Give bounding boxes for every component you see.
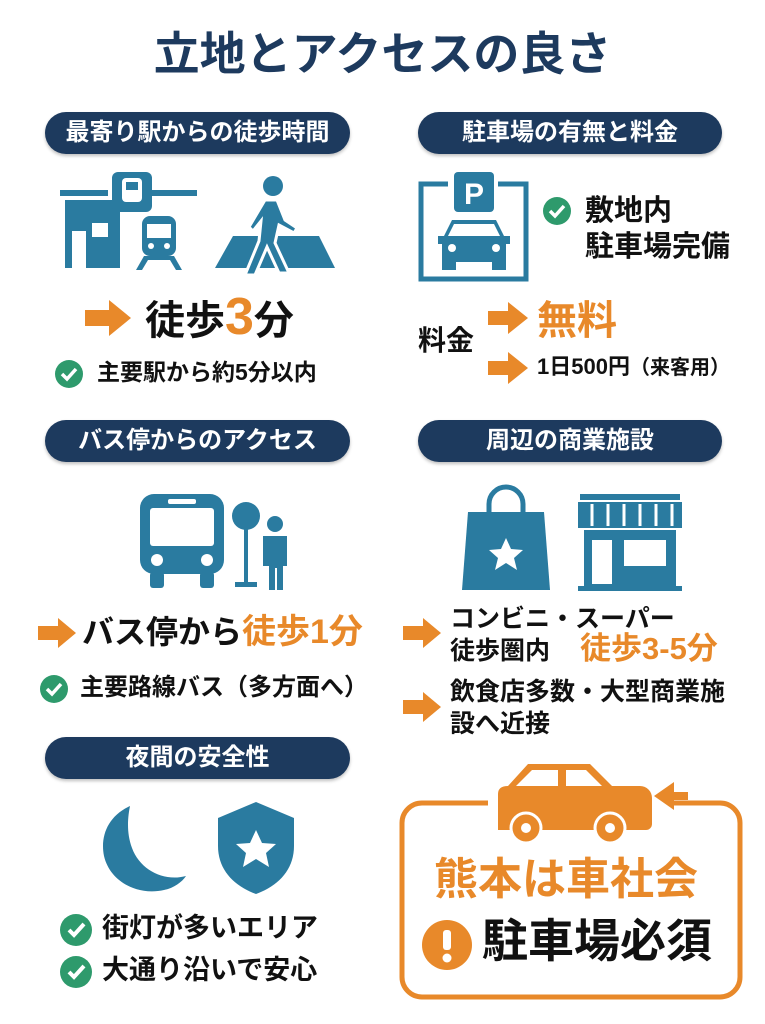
icon: bus stop — [140, 494, 287, 590]
text: 500 yen: 1日500円（来客用） — [537, 354, 730, 379]
arrows — [403, 618, 441, 722]
check item: 主要駅から約5分以内 — [97, 359, 317, 385]
heading: bus: バス停からのアクセス — [78, 427, 317, 454]
text: convenience — [450, 605, 675, 665]
text: parking required: 駐車場必須 — [482, 915, 712, 967]
check: bus lines: 主要路線バス（多方面へ） — [80, 674, 368, 701]
arrow — [38, 618, 76, 648]
text: convenience: コンビニ・スーパー — [450, 605, 675, 633]
check: streetlights: 街灯が多いエリア — [102, 913, 318, 943]
icon: moon and shield — [103, 802, 294, 894]
text: Kumamoto: 熊本は車社会 — [434, 855, 698, 904]
arrows: fee — [488, 302, 528, 384]
heading: commerce — [418, 420, 722, 462]
text: free: 無料 — [537, 299, 617, 343]
icon: shopping bag and shop — [462, 484, 682, 591]
icon: parking — [418, 172, 528, 282]
check: onsite parking: 敷地内 — [585, 195, 672, 227]
heading: bus — [45, 420, 350, 462]
text: restaurants — [450, 678, 725, 738]
text: fee: 料金 — [418, 325, 474, 356]
check: onsite parking: 駐車場完備 — [585, 231, 730, 263]
title: 立地とアクセスの良さ — [154, 28, 611, 80]
arrow — [85, 300, 131, 336]
text: walk 3-5: 徒歩3-5分 — [580, 631, 718, 666]
heading: station walk — [45, 112, 350, 154]
icon: station — [60, 172, 197, 270]
text: bus 1 min: バス停から徒歩1分 — [82, 613, 363, 651]
heading: station walk: 最寄り駅からの徒歩時間 — [66, 119, 330, 146]
heading: commerce: 周辺の商業施設 — [486, 427, 654, 454]
check: onsite parking — [543, 194, 730, 263]
text: convenience: 徒歩圏内 — [450, 637, 550, 665]
heading: parking: 駐車場の有無と料金 — [462, 119, 678, 146]
heading: night safety — [45, 737, 350, 779]
heading: night safety: 夜間の安全性 — [126, 744, 270, 771]
heading: parking — [418, 112, 722, 154]
callout: car society — [400, 764, 742, 1000]
check: main road: 大通り沿いで安心 — [102, 955, 317, 985]
icon: walker — [215, 176, 335, 274]
text: walk 3 min: 徒歩3分 — [145, 288, 294, 346]
text: restaurants: 設へ近接 — [450, 710, 550, 738]
frame with car and arrow — [400, 764, 742, 1000]
icon: parking: P — [464, 178, 484, 211]
text: restaurants: 飲食店多数・大型商業施 — [450, 678, 725, 706]
